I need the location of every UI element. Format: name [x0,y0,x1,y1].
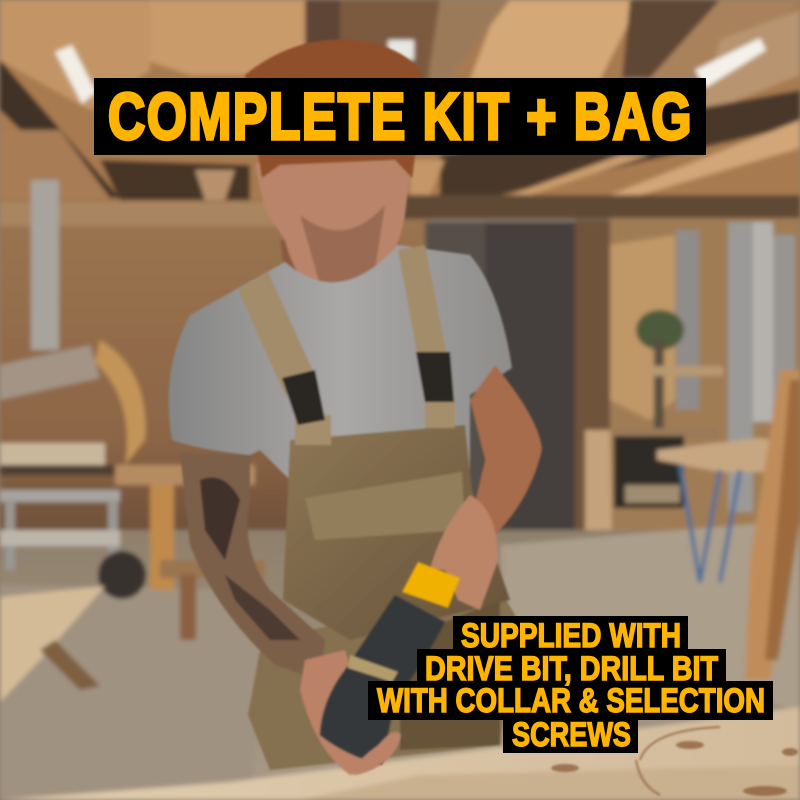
legs of overalls [248,590,515,770]
sawdust on bench [551,727,798,796]
right table [657,438,800,582]
hand over bag [354,732,401,775]
lights [55,38,766,104]
callout line 1: SUPPLIED WITH [461,617,681,655]
man [169,39,542,775]
foreground wood frame [745,370,800,680]
metal sheets and drill press [613,222,795,512]
left machinery and benches [0,443,265,640]
ceiling [0,0,800,200]
title banner [94,78,706,155]
duct on left wall [0,180,145,465]
callout line 4: SCREWS [512,716,631,754]
overall bib [283,400,510,640]
cloth bag [320,595,445,765]
floor [0,520,800,800]
upper hand [430,495,498,610]
left table [0,586,105,702]
callout line 2: DRIVE BIT, DRILL BIT [425,650,718,688]
hair [245,39,425,178]
overall straps [238,245,454,425]
right arm [470,365,542,535]
bench top [0,707,800,800]
yellow kit box [402,562,460,608]
tattooed arm [180,452,325,680]
callout: supplied items [368,616,773,754]
lower hand [300,650,400,775]
t-shirt [169,245,512,480]
back walls [0,195,800,542]
neck and face [255,155,412,310]
